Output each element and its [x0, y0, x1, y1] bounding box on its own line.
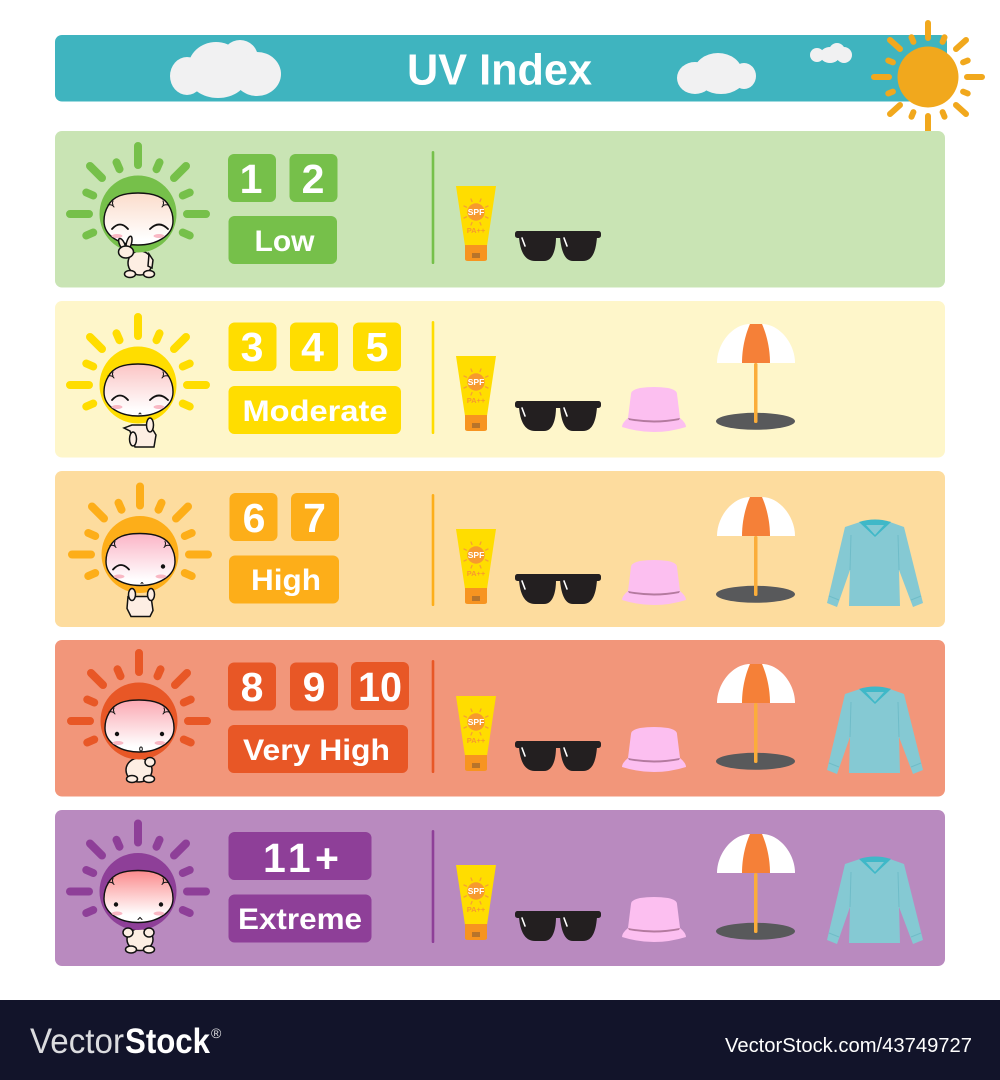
- footer watermark bar: [0, 1000, 1000, 1080]
- character: extreme: [70, 824, 206, 953]
- icon: sunscreen: PA++: [467, 905, 486, 914]
- level label: Extreme: [238, 903, 362, 936]
- level label: Low: [254, 225, 315, 258]
- icon: sunglasses: [515, 741, 601, 771]
- panel background: [55, 640, 945, 796]
- character: low: [70, 146, 206, 278]
- image id: VectorStock.com/43749727: [725, 1035, 972, 1057]
- logo: [30, 1022, 222, 1061]
- icon: shirt: [827, 686, 923, 774]
- icon: shirt: [827, 856, 923, 944]
- icon: sunscreen: PA++: [467, 396, 486, 405]
- title: UV Index: [407, 46, 593, 94]
- logo: ®: [211, 1025, 222, 1041]
- number 2: 2: [302, 156, 324, 202]
- icon: umbrella: [716, 664, 795, 770]
- logo: Stock: [125, 1022, 210, 1061]
- number 6: [230, 493, 278, 541]
- icon: umbrella: [716, 834, 795, 940]
- panel: low: [55, 131, 945, 288]
- number 9: 9: [303, 664, 325, 710]
- number 1: 1: [240, 156, 262, 202]
- icon: sunscreen: [456, 529, 496, 604]
- number 7: 7: [303, 495, 326, 541]
- panel background: [55, 301, 945, 458]
- icon: sunscreen: SPF: [468, 550, 484, 560]
- number 5: [353, 322, 401, 371]
- panel background: [55, 810, 945, 966]
- number 3: [228, 322, 276, 371]
- level label: [228, 216, 337, 264]
- icon: sunscreen: SPF: [468, 717, 484, 727]
- level label: [229, 556, 339, 604]
- panel: moderate: [55, 301, 945, 458]
- cloud: left: [170, 40, 281, 98]
- level label: [228, 725, 408, 773]
- icon: hat: [622, 727, 686, 772]
- icon: sunglasses: [515, 231, 601, 261]
- icon: sun: [874, 23, 982, 131]
- number 8: [228, 662, 276, 710]
- cloud: small: [810, 43, 852, 63]
- character: high: [72, 486, 208, 616]
- icon: sunscreen: SPF: [468, 207, 484, 217]
- icon: umbrella: [716, 497, 795, 603]
- panel background: [55, 471, 945, 627]
- number 6: 6: [243, 495, 265, 541]
- cloud: centre: [677, 53, 756, 94]
- number 5: 5: [366, 324, 388, 370]
- number 7: [291, 493, 339, 541]
- number 10: 10: [358, 664, 402, 710]
- icon: hat: [622, 897, 686, 942]
- number 9: [290, 662, 338, 710]
- character: moderate: [70, 317, 206, 447]
- icon: sunscreen: [456, 186, 496, 261]
- icon: hat: [622, 387, 686, 432]
- panel background: [55, 131, 945, 288]
- icon: hat: [622, 560, 686, 605]
- panel: high: [55, 471, 945, 627]
- number 4: [290, 322, 338, 371]
- icon: sunscreen: PA++: [467, 736, 486, 745]
- level label: High: [251, 564, 321, 597]
- header bar: [55, 35, 947, 102]
- icon: shirt: [827, 520, 923, 607]
- number 3: 3: [241, 324, 263, 370]
- number 4: 4: [301, 324, 324, 370]
- logo: Vector: [30, 1022, 124, 1061]
- icon: sunscreen: [456, 696, 496, 771]
- icon: sunscreen: SPF: [468, 886, 484, 896]
- level label: [228, 894, 372, 942]
- number 8: 8: [241, 664, 263, 710]
- icon: sunscreen: [456, 865, 496, 940]
- number 2: [290, 154, 338, 202]
- level label: Very High: [243, 734, 390, 767]
- icon: umbrella: [716, 324, 795, 430]
- header banner: [55, 23, 982, 131]
- number 11+: 11+: [263, 835, 339, 881]
- icon: sunscreen: PA++: [467, 569, 486, 578]
- icon: sunscreen: [456, 356, 496, 431]
- icon: sunscreen: SPF: [468, 377, 484, 387]
- number 1: [228, 154, 276, 202]
- icon: sunglasses: [515, 911, 601, 941]
- icon: sunglasses: [515, 574, 601, 604]
- level label: [228, 386, 401, 434]
- number 11+: [228, 832, 372, 881]
- level label: Moderate: [242, 395, 388, 428]
- icon: sunglasses: [515, 401, 601, 431]
- icon: sunscreen: PA++: [467, 226, 486, 235]
- character: very high: [71, 653, 207, 782]
- panel: very high: [55, 640, 945, 796]
- panel: extreme: [55, 810, 945, 966]
